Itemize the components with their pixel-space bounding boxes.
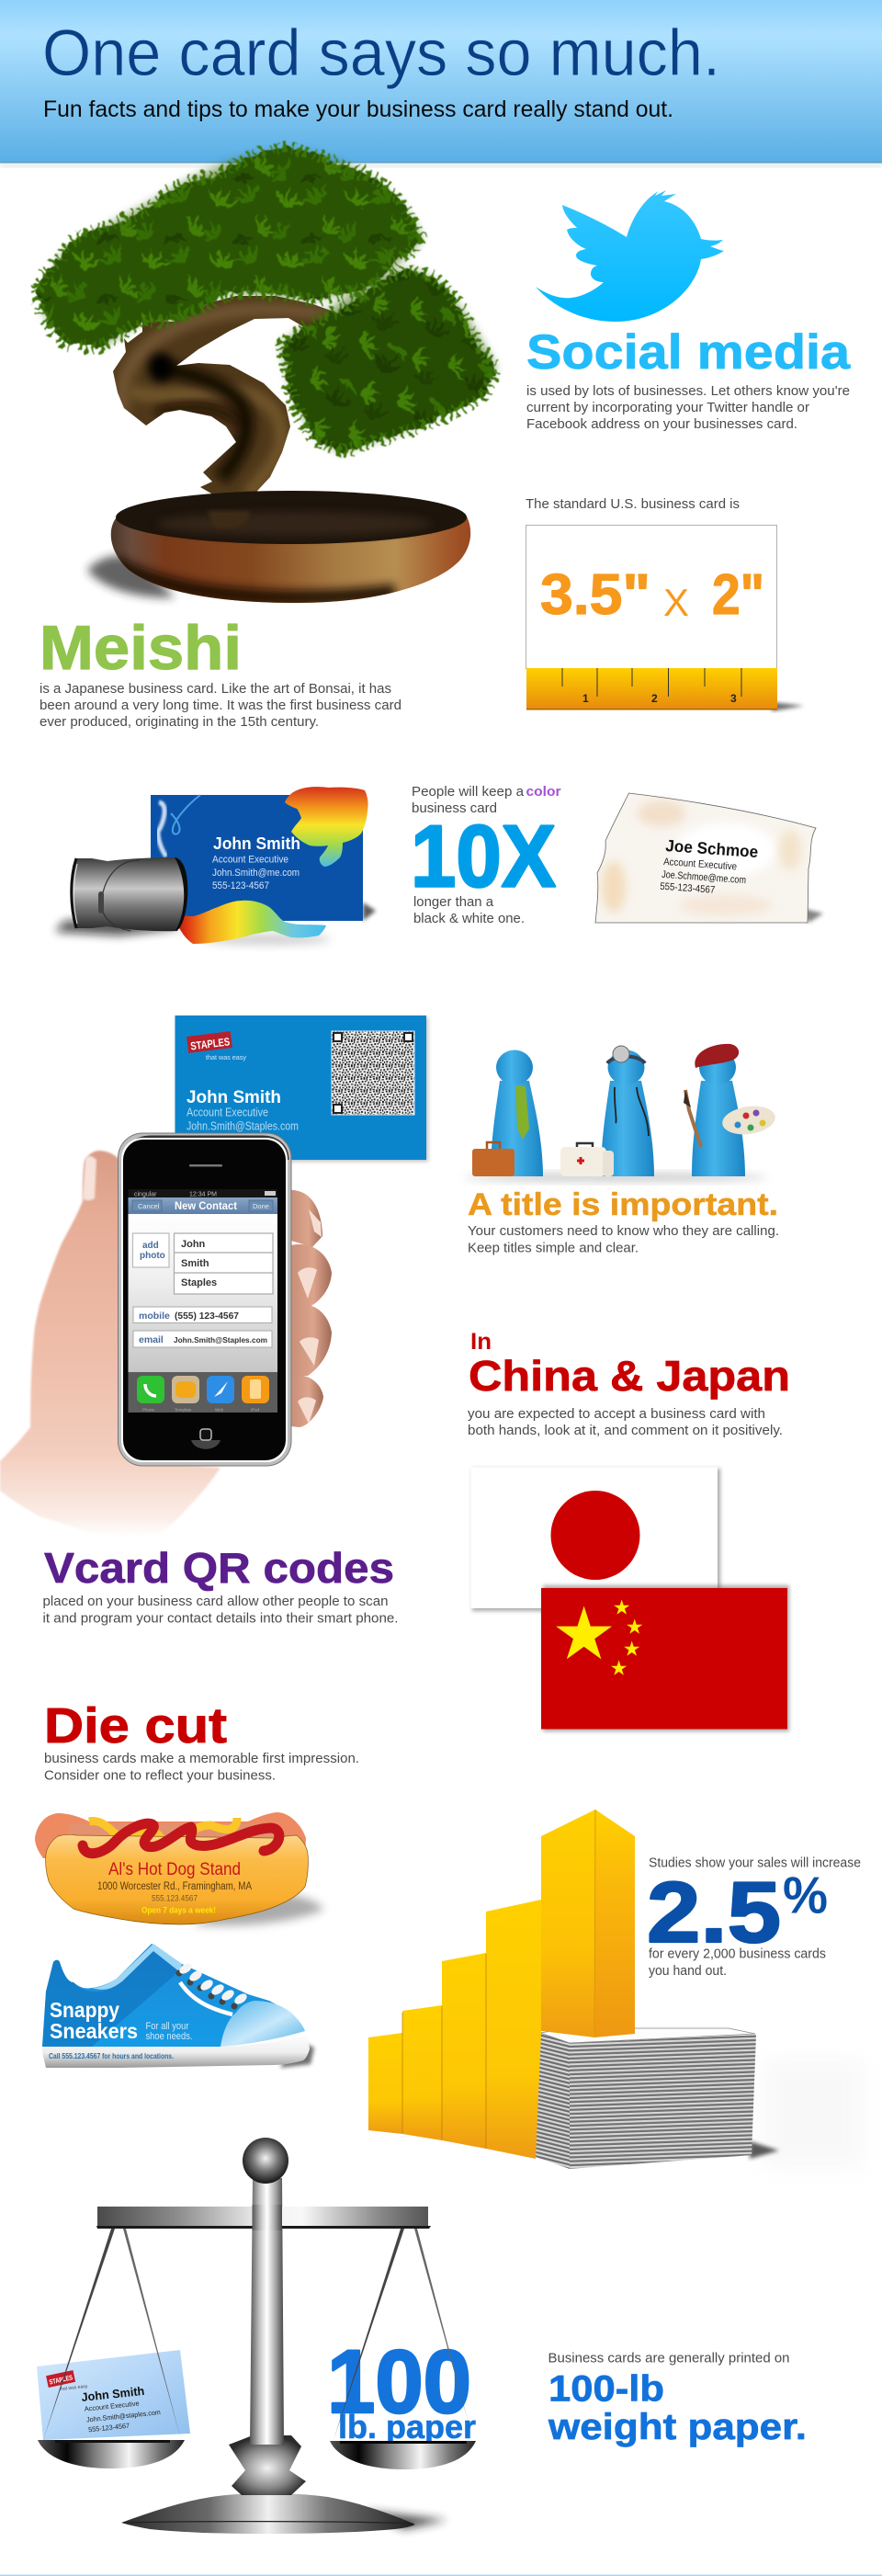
illustration: balance scale	[37, 2138, 476, 2534]
staples logo	[187, 1031, 247, 1061]
text: paper weight: Business cards are generally printed on	[548, 2351, 790, 2366]
weight label: 100 lb. paper: 100	[327, 2332, 471, 2432]
front bun	[46, 1834, 308, 1924]
bottom rule	[0, 2575, 882, 2576]
text: color stat	[411, 785, 561, 926]
thumbnail	[83, 1156, 96, 1200]
paint spill	[173, 901, 326, 944]
card on left pan: John Smith	[81, 2384, 145, 2404]
figure: artist	[684, 1044, 777, 1176]
text: Meishi body	[40, 682, 401, 730]
dimensions	[540, 563, 764, 627]
text: color stat: black & white one.	[413, 912, 525, 926]
text: title body: Your customers need to know who they are calling.	[468, 1224, 779, 1239]
ketchup	[83, 1823, 279, 1854]
illustration: iPhone contact screen	[118, 1133, 291, 1466]
foliage: left crown	[37, 147, 422, 346]
text: sales stat: for every 2,000 business cards	[649, 1946, 826, 1961]
text: Meishi body: ever produced, originating in the 15th century.	[40, 715, 319, 730]
laces	[176, 1961, 249, 2009]
illustration: blue card with paint can: John Smith	[213, 834, 300, 853]
illustration: card with ruler: 2	[651, 692, 658, 705]
collar shade	[42, 1950, 180, 2047]
staples logo: that was easy	[206, 1055, 247, 1061]
signature swirl	[158, 795, 200, 857]
illustration: iPhone contact screen: John	[181, 1239, 206, 1250]
scale neck	[229, 2435, 306, 2495]
app dock icons: iPod	[251, 1408, 260, 1412]
text: China and Japan body: both hands, look at it, and comment on it positively.	[468, 1424, 783, 1438]
illustration: blue card with paint can: Account Executive	[212, 855, 288, 866]
weight label: 100 lb. paper: lb. paper	[338, 2408, 476, 2445]
header banner	[0, 0, 882, 167]
app dock icons	[137, 1376, 269, 1412]
paint can	[72, 857, 187, 931]
shoe body	[42, 1944, 305, 2047]
illustration: hot dog card: 1000 Worcester Rd., Framingham, MA	[97, 1881, 252, 1892]
text: social media body: Facebook address on your businesses card.	[526, 417, 797, 432]
heading: 100-lb weight paper	[548, 2369, 807, 2447]
illustration: card with ruler: 3	[730, 692, 737, 705]
subtitle: Fun facts and tips to make your business card really stand out.	[43, 96, 673, 122]
bars	[368, 1810, 635, 2159]
palm and wrist	[0, 1151, 220, 1538]
illustration: card with ruler	[526, 526, 804, 711]
text: Vcard body: it and program your contact details into their smart phone.	[42, 1612, 399, 1627]
heading: In China and Japan: China & Japan	[469, 1352, 790, 1400]
heading: a title is important: A title is important.	[468, 1187, 778, 1222]
title: One card says so much.	[42, 17, 720, 90]
icon: twitter bird	[536, 190, 724, 322]
illustration: three business figures	[464, 1044, 777, 1181]
text: die cut body	[44, 1752, 359, 1783]
illustration: iPhone contact screen: Done	[253, 1202, 269, 1210]
text: social media body	[526, 384, 850, 432]
illustration: QR business card	[175, 1016, 428, 1162]
text: title body: Keep titles simple and clear.	[468, 1241, 639, 1255]
illustration: faded black and white card: Joe Schmoe	[665, 836, 759, 861]
left pan	[38, 2229, 185, 2468]
card on left pan: 555-123-4567	[88, 2422, 130, 2434]
text: Vcard body: placed on your business card allow other people to scan	[42, 1594, 388, 1609]
text: color stat: longer than a	[413, 895, 494, 910]
heading: Vcard QR codes: Vcard QR codes	[44, 1544, 394, 1592]
heading: Meishi: Meishi	[40, 613, 242, 683]
illustration: iPhone contact screen: add	[142, 1241, 159, 1251]
illustration: iPhone contact screen: 12:34 PM	[189, 1191, 217, 1198]
app dock icons: Phone	[142, 1408, 155, 1412]
illustration: iPhone contact screen: John.Smith@Staples.com	[174, 1336, 267, 1345]
scale knob	[243, 2138, 288, 2184]
illustration: iPhone contact screen: Smith	[181, 1258, 209, 1269]
flag: Japan	[470, 1467, 720, 1611]
text: standard size intro: The standard U.S. business card is	[526, 497, 740, 512]
heading: In China and Japan: In	[470, 1329, 492, 1355]
text: social media body: current by incorporating your Twitter handle or	[526, 401, 809, 415]
illustration: sneaker card: Snappy	[50, 1998, 119, 2022]
foliage soft shadow	[43, 153, 496, 451]
illustration: faded black and white card: 555-123-4567	[660, 881, 716, 896]
figure: executive	[472, 1050, 543, 1176]
big number 2.5%: 2.5	[647, 1864, 781, 1960]
text: paper weight	[548, 2351, 807, 2447]
text: title body	[468, 1224, 779, 1255]
illustration: faded black and white card	[595, 793, 823, 923]
big number 2.5%	[647, 1864, 828, 1960]
big number 2.5%: %	[783, 1866, 828, 1924]
illustration: QR business card: Account Executive	[187, 1105, 268, 1119]
dimensions: X	[663, 581, 689, 624]
scale base	[121, 2493, 415, 2534]
illustration: iPhone contact screen: New Contact	[175, 1199, 237, 1212]
text: China and Japan body	[468, 1407, 783, 1438]
text: die cut body: business cards make a memorable first impression.	[44, 1752, 359, 1766]
illustration: QR business card: John.Smith@Staples.com	[187, 1119, 299, 1132]
illustration: iPhone contact screen: photo	[140, 1251, 165, 1261]
text: Meishi body: been around a very long time. It was the first business card	[40, 698, 401, 713]
illustration: sneaker card: shoe needs.	[145, 2031, 193, 2042]
illustration: iPhone contact screen: Cancel	[138, 1202, 160, 1210]
text: Vcard body	[42, 1594, 399, 1627]
illustration: hot dog card: Al's Hot Dog Stand	[108, 1860, 241, 1879]
illustration: faded black and white card: Joe.Schmoe@me.com	[662, 869, 746, 886]
sole	[42, 2034, 310, 2068]
staples logo: STAPLES	[190, 1035, 231, 1052]
big number 10X: 10X	[411, 807, 556, 906]
text: China and Japan body: you are expected to accept a business card with	[468, 1407, 765, 1422]
illustration: bonsai tree	[37, 147, 496, 607]
text: sales stat: you hand out.	[649, 1964, 727, 1979]
heading: 100-lb weight paper: 100-lb	[548, 2369, 664, 2410]
illustration: sneaker card	[42, 1944, 314, 2068]
dimensions: 2"	[712, 563, 764, 627]
illustration: hot dog card: Open 7 days a week!	[141, 1906, 216, 1915]
illustration: card with ruler: 1	[582, 692, 589, 705]
heading: 100-lb weight paper: weight paper.	[548, 2407, 807, 2447]
text: Meishi body: is a Japanese business card. Like the art of Bonsai, it has	[40, 682, 391, 697]
flag: China	[541, 1585, 789, 1731]
card on left pan: STAPLES	[49, 2373, 74, 2387]
text: color stat: business card	[412, 801, 497, 816]
illustration: sneaker card: Sneakers	[50, 2019, 138, 2043]
card on left pan: that was easy	[60, 2384, 88, 2392]
back bun	[35, 1812, 306, 1858]
illustration: hot dog card: 555.123.4567	[152, 1893, 198, 1902]
foliage: right crown	[282, 270, 496, 451]
illustration: blue card with paint can: John.Smith@me.com	[212, 868, 300, 879]
text: social media body: is used by lots of businesses. Let others know you're	[526, 384, 850, 399]
pot shadow	[87, 556, 175, 597]
text: die cut body: Consider one to reflect your business.	[44, 1768, 276, 1783]
fingers	[291, 1190, 332, 1427]
right pan	[330, 2229, 476, 2469]
illustration: iPhone contact screen: email	[139, 1334, 164, 1345]
illustration: blue card with paint can	[55, 787, 376, 945]
card stack	[536, 2028, 756, 2169]
mustard	[89, 1818, 237, 1843]
text: sales stat	[647, 1856, 861, 1979]
illustration: sneaker card: Call 555.123.4567 for hours and locations.	[49, 2052, 174, 2060]
illustration: hot dog card	[35, 1812, 323, 1925]
QR code	[332, 1031, 414, 1115]
trunk	[113, 296, 338, 494]
app dock icons: Web	[215, 1408, 224, 1412]
illustration: iPhone contact screen: cingular	[134, 1191, 157, 1198]
text: color stat: color	[526, 785, 561, 800]
text: sales stat: Studies show your sales will increase	[649, 1856, 861, 1871]
toe cap	[220, 2001, 305, 2047]
illustration: QR business card: John Smith	[187, 1088, 281, 1107]
text: color stat: People will keep a	[412, 785, 525, 800]
card on left pan: Account Executive	[84, 2399, 140, 2413]
app dock icons: Template	[175, 1408, 192, 1412]
illustration: iPhone contact screen: Staples	[181, 1277, 217, 1288]
pot	[101, 491, 478, 607]
scale beam	[96, 2205, 431, 2230]
illustration: bar chart on card stack	[368, 1810, 864, 2169]
heading: social media: Social media	[526, 325, 851, 380]
illustration: blue card with paint can: 555-123-4567	[212, 880, 269, 891]
dimensions: 3.5"	[540, 563, 650, 627]
card on left pan: John.Smith@staples.com	[86, 2408, 161, 2424]
illustration: iPhone contact screen: (555) 123-4567	[175, 1311, 239, 1322]
heading: In China and Japan	[469, 1329, 790, 1400]
scale pole	[250, 2178, 284, 2445]
card on left pan	[37, 2350, 190, 2440]
illustration: iPhone contact screen: mobile	[139, 1311, 170, 1322]
illustration: faded black and white card: Account Executive	[663, 857, 737, 872]
heading: Die cut: Die cut	[44, 1698, 227, 1753]
illustration: sneaker card: For all your	[145, 2021, 189, 2032]
illustration: hand	[0, 1151, 332, 1538]
figure: doctor	[560, 1046, 654, 1176]
paint splash	[285, 787, 368, 867]
